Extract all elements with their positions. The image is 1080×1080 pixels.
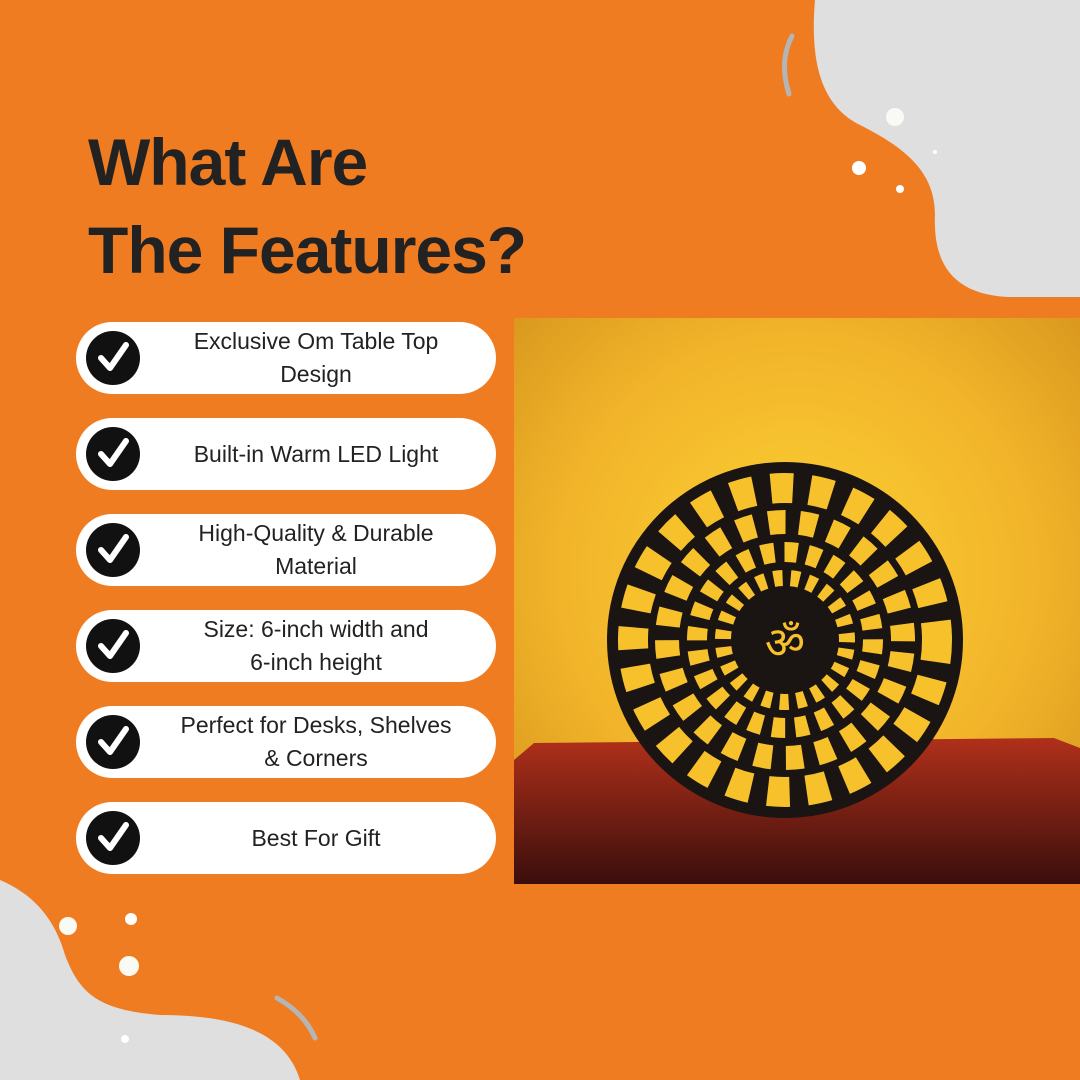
feature list [76,322,496,874]
feature 1 [76,322,496,394]
feature 4: Size: 6-inch width and [203,616,428,642]
title [88,125,526,287]
feature 6 [76,802,496,874]
feature 5 [76,706,496,778]
feature 3: High-Quality & Durable [198,520,434,546]
feature 1: Exclusive Om Table Top [194,328,438,354]
feature 4: 6-inch height [250,649,382,675]
feature 5: & Corners [264,745,368,771]
product photo: om lamp [514,318,1080,884]
feature 4 [76,610,496,682]
product photo: om lamp: ॐ [765,618,805,669]
feature 3 [76,514,496,586]
feature 2: Built-in Warm LED Light [194,440,438,466]
feature 6: Best For Gift [251,824,381,850]
feature 2 [76,418,496,490]
title: What Are [88,125,367,199]
feature 5: Perfect for Desks, Shelves [180,712,452,738]
feature 1: Design [280,361,352,387]
title: The Features? [88,213,526,287]
feature 3: Material [275,553,357,579]
